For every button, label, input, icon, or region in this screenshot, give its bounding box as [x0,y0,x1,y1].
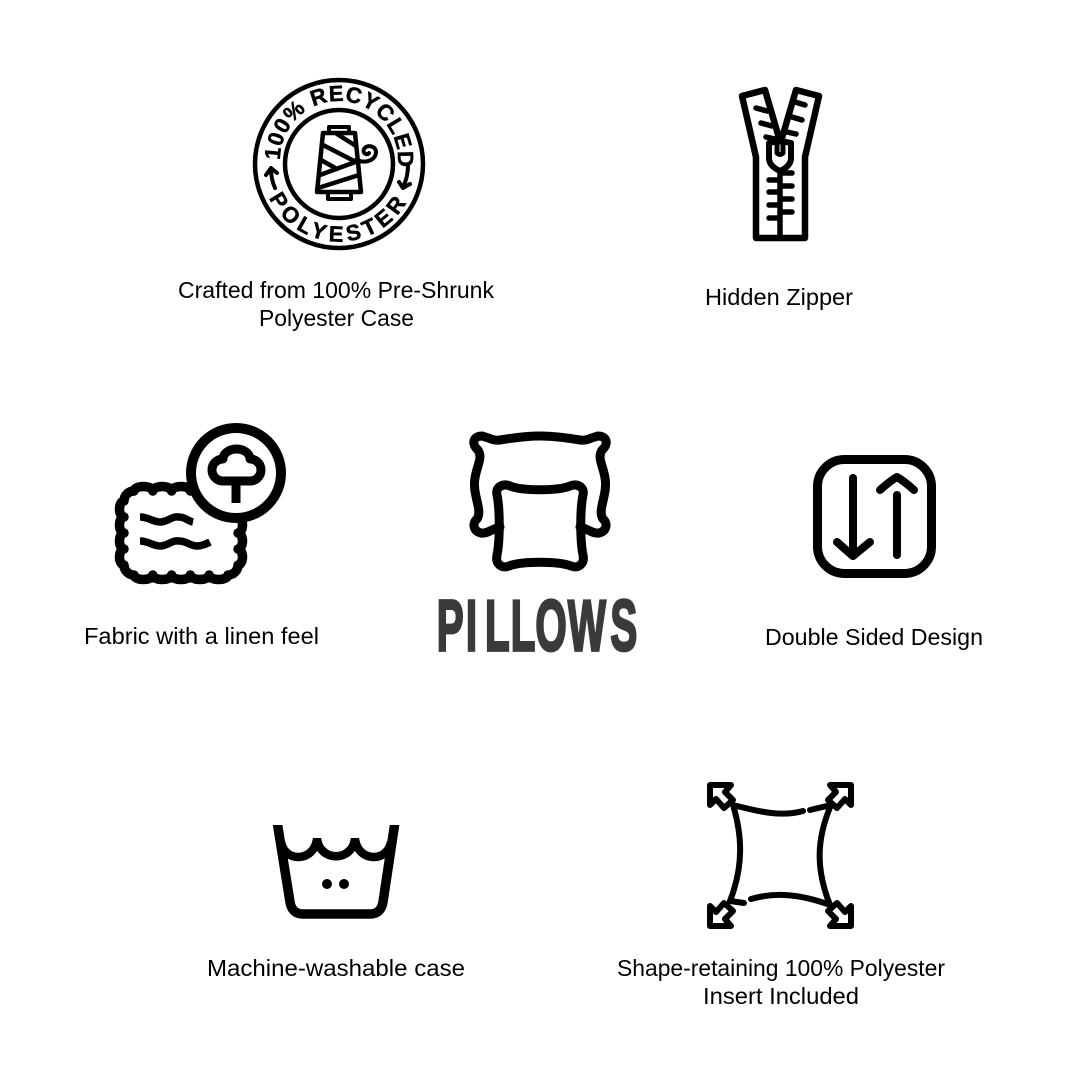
caption: double sided design: Double Sided Design [765,624,983,650]
caption: machine-washable case: Machine-washable case [207,955,465,981]
caption: shape-retaining insert: Insert Included [703,983,859,1009]
caption: crafted from polyester: Polyester Case [259,305,414,331]
panel: central pillows logo [437,436,637,667]
icon: up and down arrows in rounded square [818,460,932,574]
caption: shape-retaining insert: Shape-retaining 100% Polyester [617,955,945,981]
panel: recycled polyester [178,78,494,331]
icon: 100% recycled polyester badge: 100% RECYCLED [264,85,414,166]
icon: two pillows [474,436,606,567]
icon: 100% recycled polyester badge: POLYESTER [269,191,407,242]
panel: double sided design [765,460,983,650]
icon: wash tub [262,805,410,914]
icon: 100% recycled polyester badge [252,78,426,250]
heading: pillows: PILLOWS [437,587,637,667]
icon: stretching cushion with corner arrows [710,785,851,926]
panel: shape-retaining insert [617,785,945,1009]
icon: cotton tree in circle [191,428,281,518]
icon: scalloped fabric [120,487,242,580]
caption: hidden zipper: Hidden Zipper [705,284,853,310]
caption: fabric with a linen feel: Fabric with a linen feel [84,623,319,649]
icon: zipper [742,90,819,238]
panel: linen feel fabric [84,428,319,649]
caption: crafted from polyester: Crafted from 100% Pre-Shrunk [178,277,494,303]
panel: machine-washable [207,805,465,981]
panel: hidden zipper [705,90,853,310]
